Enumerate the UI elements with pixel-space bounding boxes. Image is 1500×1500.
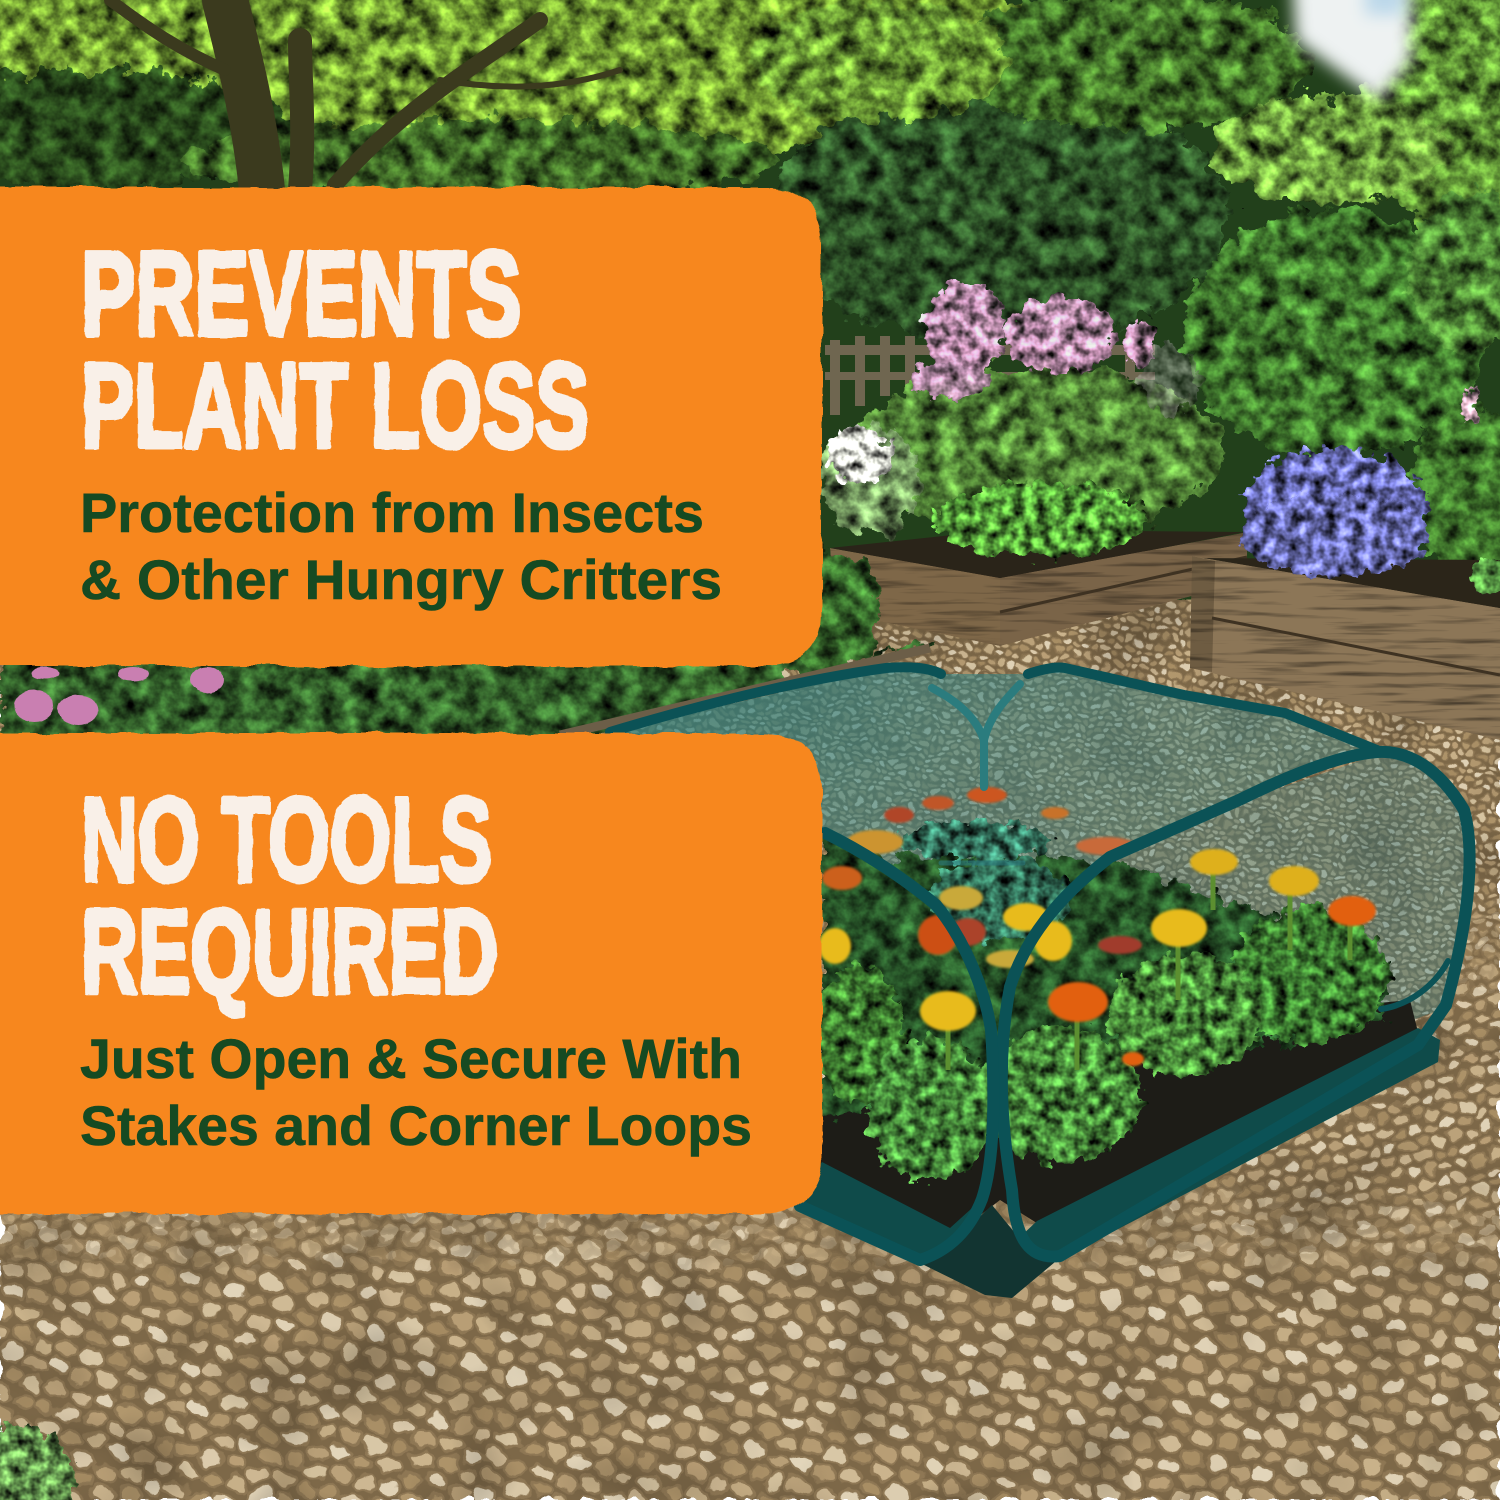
hoop frames (610, 667, 1470, 1260)
heading: PREVENTS (81, 227, 521, 361)
raised bed: right (1190, 493, 1500, 740)
tree trunk and branches (110, 0, 620, 190)
sky gap (1292, 0, 1412, 100)
picket fence (825, 335, 1155, 415)
fabric base band: left side (789, 1162, 982, 1264)
sparse pink spikes far right (1461, 385, 1479, 425)
subheading (80, 1027, 752, 1157)
lavender (1243, 448, 1427, 572)
panel: no tools required (0, 733, 822, 1214)
heading (81, 773, 498, 1019)
mesh side window showing gravel (1000, 755, 1466, 1050)
plant in bottom left corner (0, 1425, 75, 1500)
subheading: & Other Hungry Critters (80, 548, 722, 611)
gravel path (0, 600, 1500, 1500)
heading (81, 227, 589, 473)
panel: prevents plant loss (0, 187, 822, 666)
pink flower spikes (910, 280, 1156, 398)
heading: PLANT LOSS (81, 339, 589, 473)
dark base at front corner (922, 1205, 1055, 1298)
marigold stems (948, 870, 1350, 1070)
plants inside tent (821, 840, 1385, 1120)
background: garden trees and sky (0, 0, 1500, 640)
flower bed strip between panels (0, 550, 930, 745)
fabric base band: right side (1019, 1028, 1440, 1262)
soil and interior base (815, 1000, 1420, 1235)
subheading: Protection from Insects (80, 481, 704, 544)
pink flowers (14, 667, 224, 725)
marigold blooms (819, 787, 1376, 1066)
panel background (0, 187, 822, 666)
heading: NO TOOLS (81, 773, 492, 907)
pop-up garden tent (610, 667, 1470, 1298)
subheading (80, 481, 722, 611)
Y brace (932, 684, 1020, 787)
heading: REQUIRED (81, 885, 498, 1019)
panel background (0, 733, 822, 1214)
flowering shrubs (820, 365, 1500, 575)
subheading: Stakes and Corner Loops (80, 1094, 752, 1157)
raised bed: back centre (830, 482, 1248, 646)
white flowers (828, 345, 1200, 483)
tree foliage (0, 0, 1500, 460)
subheading: Just Open & Secure With (80, 1027, 742, 1090)
mesh roof showing gravel (610, 668, 1377, 985)
